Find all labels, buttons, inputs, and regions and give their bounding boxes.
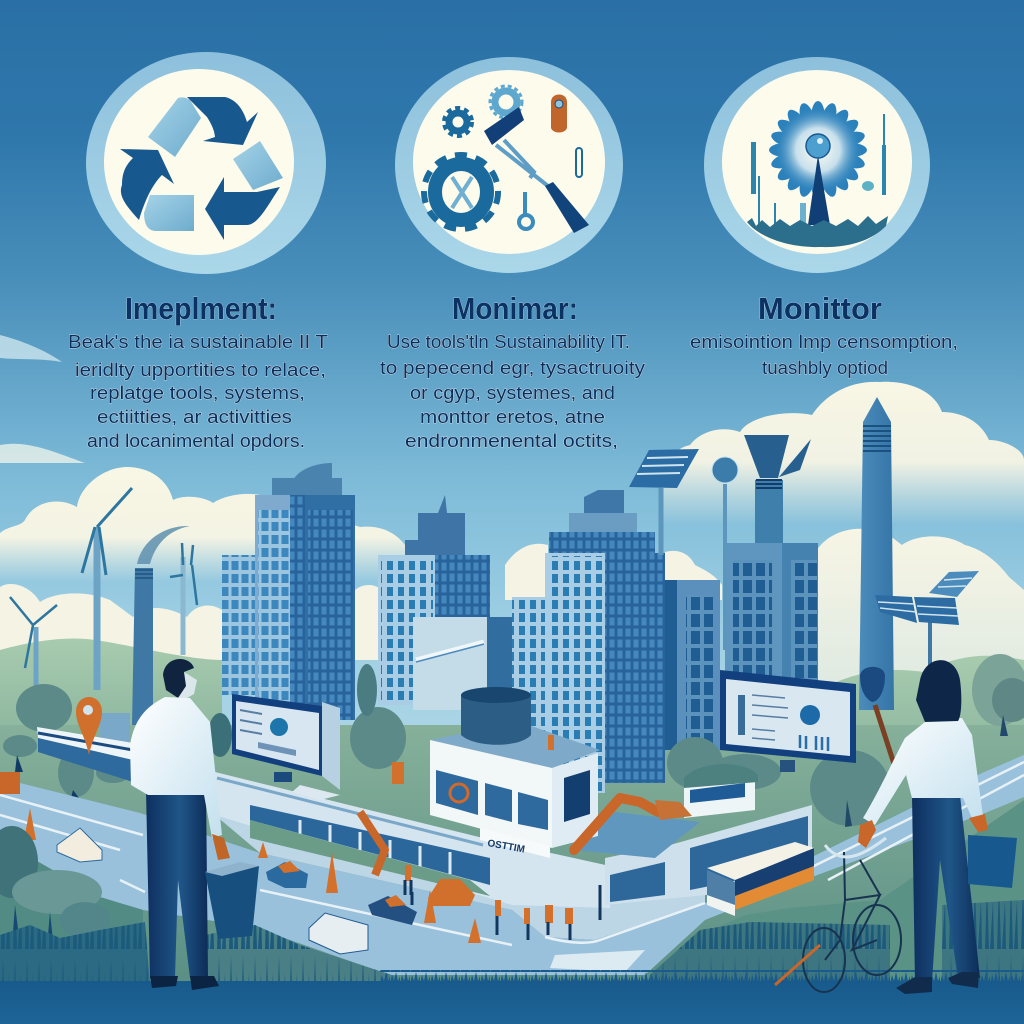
billboard — [413, 617, 487, 710]
building: obelisk tower — [859, 397, 894, 710]
text block: monitor: tuashbly optiod — [762, 357, 888, 378]
text block: monimar: endronmenental octits, — [405, 430, 618, 451]
cloud: upper right — [660, 382, 1024, 530]
icon: small gear — [444, 108, 472, 136]
building: central white: OSTTIM — [486, 838, 526, 856]
text block: monimar: monttor eretos, atne — [420, 406, 605, 427]
heading: monitor: Monittor — [758, 291, 882, 326]
icon: slot — [576, 148, 582, 177]
text block: monimar — [380, 331, 646, 451]
man figure — [130, 659, 230, 990]
icon: light gear — [490, 86, 522, 118]
buildings — [222, 397, 894, 793]
clouds — [0, 382, 1024, 700]
trees background — [3, 654, 1024, 827]
vehicle: orange block left — [0, 772, 20, 794]
building: left tower — [255, 463, 355, 720]
robot arm: right — [574, 798, 658, 850]
woman shirt — [863, 718, 983, 825]
woman shoes — [896, 977, 932, 994]
solar panel: top — [629, 449, 699, 555]
hills — [0, 638, 1024, 780]
cloud: upper left — [0, 467, 405, 582]
icon: side poles — [751, 114, 886, 227]
text block: monimar: Use tools'tln Sustainability IT. — [387, 331, 630, 352]
building: right — [725, 435, 818, 683]
turbine: left — [10, 597, 57, 690]
chimney with fan — [744, 435, 811, 543]
vehicle: white van — [309, 913, 368, 954]
chimney — [132, 526, 190, 725]
building: block beside tower — [665, 580, 720, 750]
cloud: lower right — [800, 529, 1024, 700]
orange block — [655, 800, 692, 820]
panel: tools circle — [395, 57, 623, 273]
building: middle — [378, 495, 512, 710]
text block: monitor — [690, 331, 958, 378]
building: right low — [575, 764, 812, 905]
broom — [860, 667, 895, 767]
man head — [163, 659, 197, 702]
building: central white — [430, 722, 600, 858]
man shoes — [150, 976, 178, 988]
text block: monimar: or cgyp, systemes, and — [410, 382, 615, 403]
cloud: behind centre right — [665, 551, 722, 600]
icon: wrench — [519, 192, 533, 229]
vehicle: left car — [266, 861, 308, 888]
text block: implement — [68, 331, 328, 451]
man trousers — [146, 790, 208, 978]
bin — [205, 862, 259, 939]
cloud: behind middle — [355, 585, 380, 660]
grass foreground — [0, 800, 1024, 985]
cones and workers — [24, 735, 573, 943]
solar panel: right — [875, 571, 979, 670]
vehicle: mid car — [368, 895, 417, 925]
text block: implement: Beak's the ia sustainable II T — [68, 331, 328, 352]
building: centre tower — [545, 490, 665, 793]
panel: monitor circle — [704, 57, 930, 273]
toolbox — [968, 835, 1017, 888]
low buildings — [37, 687, 812, 908]
turbine: rear — [170, 543, 197, 655]
icon: orange tag — [551, 94, 567, 132]
ground lawn — [0, 725, 1024, 1024]
wind turbines and chimney — [10, 488, 197, 725]
turbine: tall — [82, 488, 132, 690]
robot arm: left — [360, 812, 385, 875]
icon: grass mound — [747, 216, 888, 247]
icon: hammer tool — [484, 107, 589, 233]
text block: monimar: to pepecend egr, tysactruoity — [380, 357, 646, 378]
wispy clouds — [0, 335, 85, 463]
woman figure — [858, 660, 1017, 994]
tank — [461, 687, 531, 745]
text block: monitor: emisointion lmp censomption, — [690, 331, 958, 352]
man hand — [212, 834, 230, 860]
bus — [707, 842, 814, 916]
bicycle — [775, 838, 901, 992]
building: far left — [222, 555, 255, 695]
icon: recycling arrows — [120, 97, 283, 240]
map pin — [76, 697, 102, 755]
woman trousers — [912, 795, 980, 982]
building: lower block — [512, 597, 546, 792]
building: left low — [37, 713, 133, 782]
vehicle: pale van — [57, 828, 102, 862]
road network — [0, 755, 1024, 985]
building: long front — [215, 772, 610, 908]
lamp — [712, 457, 738, 650]
cloud: lower left — [0, 584, 222, 670]
cloud: behind centre left — [505, 544, 548, 600]
icon: blue flower — [769, 101, 867, 225]
bottom band — [0, 970, 1024, 1024]
text block: implement: and locanimental opdors. — [87, 430, 305, 451]
monitor: left screen — [232, 694, 340, 800]
heading: monimar: Monimar: — [452, 291, 578, 326]
woman hair — [916, 660, 961, 722]
text block: implement: replatge tools, systems, — [90, 382, 305, 403]
foreground trees — [0, 826, 110, 970]
solar panels and lamp — [629, 449, 979, 670]
icon: large gear — [424, 155, 498, 229]
heading: implement: Imeplment: — [125, 291, 277, 326]
man shirt — [130, 697, 222, 838]
text block: implement: ieridlty upportities to relace, — [75, 359, 326, 380]
woman gloves — [858, 814, 988, 848]
robotic arms and machinery — [0, 735, 692, 954]
text block: implement: ectiitties, ar activitties — [97, 406, 292, 427]
panel: recycle circle — [86, 52, 326, 274]
monitor: right screen — [720, 670, 856, 772]
vehicle: orange cart — [428, 879, 475, 906]
